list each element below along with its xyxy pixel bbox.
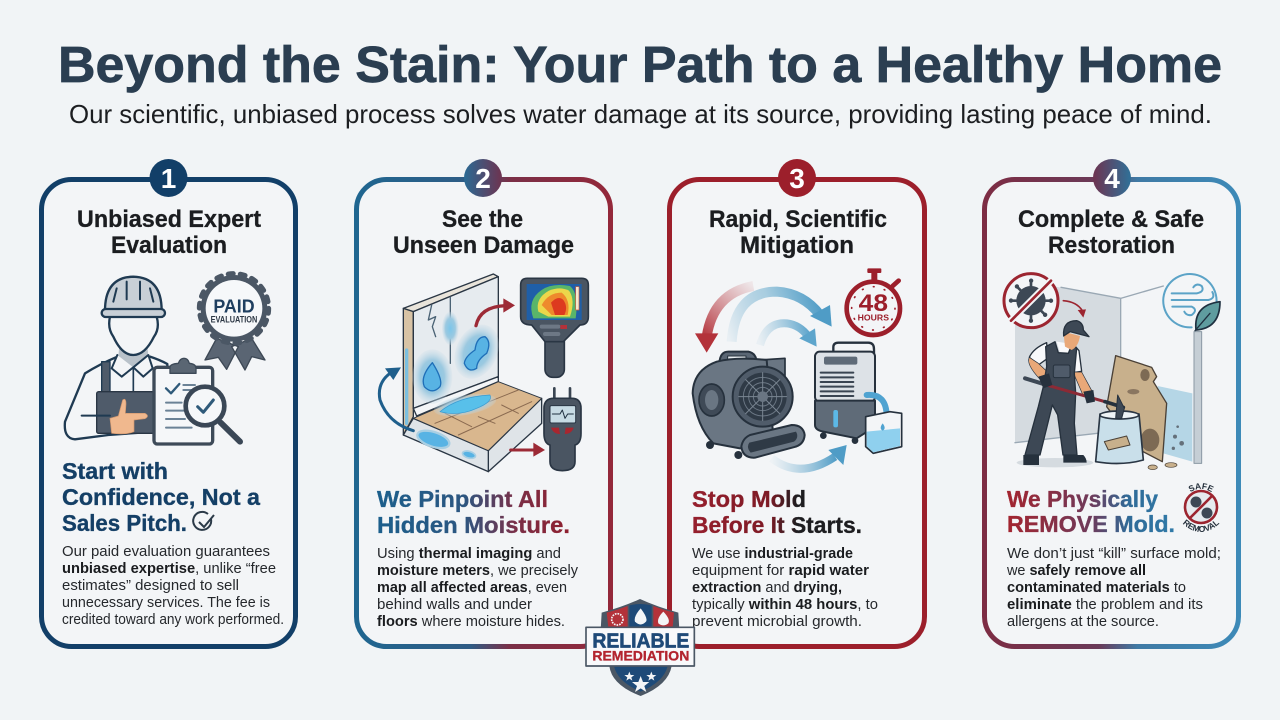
card 4 subheading [1007,486,1175,537]
card 2 heading: See the [442,206,523,233]
card 1 frame [42,180,296,646]
icon: check circle [193,512,214,530]
icon: clean air and leaf [1163,274,1220,331]
card 4 body text: contaminated materials to [1007,580,1186,596]
card 2 subheading: We Pinpoint All [377,486,548,512]
step number 3: 3 [789,163,805,194]
moisture stains [407,312,507,460]
card 3 subheading: Before It Starts. [692,512,862,538]
card 1 heading: Evaluation [111,232,227,259]
icon: no mold symbol [1004,274,1058,328]
card 4 subheading: We Physically [1007,486,1158,512]
step number 4 [1093,159,1131,197]
icon: safe removal stamp: REMOVAL [1182,519,1220,532]
card 1 body text: unbiased expertise, unlike “free [62,561,276,577]
card 4 body text [1006,546,1221,630]
step number 2: 2 [475,163,491,194]
logo: reliable remediation shield: RELIABLE [592,631,689,653]
card 2 body text: moisture meters, we precisely [377,563,579,579]
card 3 body text: equipment for rapid water [692,563,869,579]
card 1 body text: unnecessary services. The fee is [62,595,270,611]
logo: reliable remediation shield [586,599,694,696]
icon: moisture meter [544,388,581,471]
card 4 frame [984,180,1238,646]
card 4 body text: we safely remove all [1006,563,1146,579]
card 2 body text [377,546,579,630]
icon: air mover fan [693,352,805,459]
card 4 body text: We don’t just “kill” surface mold; [1007,546,1221,562]
logo: reliable remediation shield: REMEDIATION [592,648,689,663]
card 2 body text: behind walls and under [377,597,532,613]
moldy drywall board [1107,356,1167,462]
card 1 subheading: Confidence, Not a [62,484,261,510]
card 3 body text: prevent microbial growth. [692,614,862,630]
illustration: inspector with clipboard and paid evaluation badge [65,274,269,444]
card 4 heading: Complete & Safe [1018,206,1204,233]
icon: dehumidifier with water tank [815,343,902,453]
card 1 subheading: Sales Pitch. [62,510,187,536]
card 3 frame [670,180,924,646]
icon: paid evaluation ribbon badge: EVALUATION [211,314,257,324]
card 2 body text: Using thermal imaging and [377,546,561,562]
card 4 subheading: REMOVE Mold. [1007,511,1175,537]
icon: safe removal stamp: SAFE [1188,483,1214,492]
card 4 body text: eliminate the problem and its [1007,597,1203,613]
card 2 heading [393,206,574,259]
icon: 48 hours stopwatch: HOURS [858,312,889,322]
card 3 body text: typically within 48 hours, to [692,597,878,613]
card 3 subheading [692,486,862,538]
card 2 frame [356,180,610,646]
card 4 body text: allergens at the source. [1007,614,1159,630]
icon: safe removal stamp [1182,483,1220,532]
card 2 body text: map all affected areas, even [377,580,567,596]
icon: 48 hours stopwatch: 48 [859,290,888,317]
card 3 body text [692,546,878,630]
arrow: moisture to wall [379,367,413,431]
panel: step 3 rapid scientific mitigation [670,159,924,646]
card 3 body text: extraction and drying, [692,580,842,596]
card 2 heading: Unseen Damage [393,232,574,259]
title: Beyond the Stain: Your Path to a Healthy Home [58,36,1222,93]
step number 4: 4 [1104,163,1120,194]
icon: paid evaluation ribbon badge: PAID [213,296,255,317]
card 4 heading: Restoration [1048,232,1175,259]
card 3 heading: Mitigation [740,232,854,259]
step number 1 [150,159,188,197]
card 3 body text: We use industrial-grade [692,546,853,562]
icon: thermal imaging camera [521,278,588,377]
card 1 subheading: Start with [62,458,168,484]
panel: step 2 see the unseen damage [356,159,610,646]
airflow arrows [695,286,847,469]
panel: step 1 unbiased expert evaluation [42,159,296,646]
arrow: floor to moisture meter [511,443,545,457]
card 4 heading [1018,206,1204,259]
icon: 48 hours stopwatch [847,268,900,335]
card 1 subheading [62,458,261,536]
icon: paid evaluation ribbon badge [199,274,269,370]
step number 1: 1 [161,163,176,194]
step number 3 [778,159,816,197]
illustration: wall cutaway with thermal camera and moisture meter [379,274,588,472]
arrow: mold symbol to wall [1063,301,1086,318]
card 3 subheading: Stop Mold [692,486,806,512]
card 3 heading [709,206,887,259]
card 2 subheading: Hidden Moisture. [377,512,570,538]
arrow: wall to thermal camera [476,298,515,326]
bag with debris [1096,411,1177,470]
step number 2 [464,159,502,197]
card 1 heading: Unbiased Expert [77,206,261,233]
worker figure [1017,321,1124,467]
card 1 heading [77,206,261,259]
illustration: worker removing moldy drywall [1004,274,1220,470]
card 3 heading: Rapid, Scientific [709,206,887,233]
card 1 body text: Our paid evaluation guarantees [62,544,270,560]
card 2 body text: floors where moisture hides. [377,614,565,630]
card 1 body text [62,544,284,628]
panel: step 4 complete and safe restoration [982,159,1241,649]
subtitle: Our scientific, unbiased process solves water damage at its source, providing lasting peace of mind. [69,99,1212,129]
card 1 body text: estimates” designed to sell [62,578,239,594]
card 2 subheading [377,486,570,538]
card 1 body text: credited toward any work performed. [62,612,284,628]
illustration: air mover, dehumidifier and airflow arrows [693,268,902,469]
